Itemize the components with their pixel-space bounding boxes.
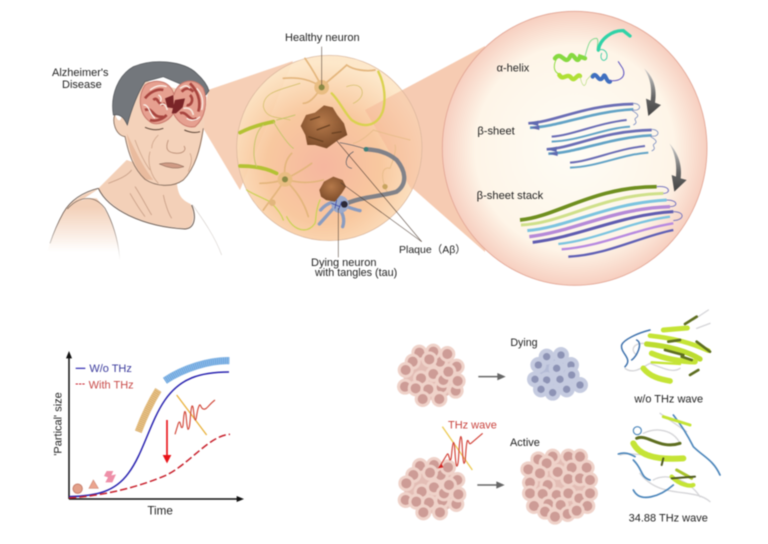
exposed brain	[140, 81, 206, 127]
legend: With THz	[89, 379, 134, 391]
circle background	[442, 11, 707, 285]
axis labels: Time	[147, 505, 173, 518]
small plaque	[319, 177, 346, 202]
faint neuron right	[353, 130, 410, 195]
axes	[66, 351, 244, 502]
axis labels	[52, 392, 173, 518]
label: Dying neuron with tangles (tau): with tangles (tau)	[314, 267, 397, 279]
panel: protein structures	[618, 310, 720, 524]
panel: cell clusters	[397, 337, 598, 525]
circle background	[237, 55, 422, 241]
beta-sheet stack	[520, 186, 682, 257]
large plaque	[301, 105, 347, 148]
cone: neuron circle to protein circle	[365, 46, 485, 252]
arrow to active cells	[477, 481, 505, 489]
arrow to dying cells	[478, 373, 506, 380]
THz wave on cells	[438, 427, 483, 470]
curve: with THz	[69, 434, 230, 498]
beta-sheet upper pair	[528, 103, 640, 142]
body and shirt	[47, 160, 222, 266]
label: THz wave: THz wave	[448, 419, 497, 431]
axis labels: 'Partical' size	[52, 392, 64, 456]
label: 34.88 THz wave: 34.88 THz wave	[629, 512, 708, 524]
legend: W/o THz	[89, 363, 132, 375]
dying neuron with tangles	[319, 143, 404, 227]
protein with 34.88 THz wave	[618, 413, 720, 502]
alpha-helix protein	[554, 31, 630, 86]
label: Plaque (Aβ): Plaque（Aβ）	[399, 244, 466, 256]
particles	[73, 361, 229, 493]
label: Alzheimer's Disease	[52, 67, 109, 91]
label: β-sheet stack: β-sheet stack	[477, 190, 544, 202]
arrow: helix to sheet	[644, 68, 661, 116]
arrow: sheet to stack	[669, 143, 687, 192]
leader lines	[322, 47, 422, 257]
THz wave	[175, 395, 215, 435]
curve: without THz	[69, 372, 229, 497]
illustration: man with Alzheimer's disease	[47, 62, 222, 266]
legend	[76, 363, 134, 391]
label: Active: Active	[510, 437, 540, 449]
hair	[113, 62, 209, 125]
healthy neuron left	[240, 115, 323, 230]
cone: brain to neuron circle	[203, 61, 293, 190]
label: Dying neuron with tangles (tau): Dying neuron	[311, 257, 376, 269]
panel: neuron circle	[237, 47, 422, 257]
cluster: active cells	[520, 449, 598, 525]
label: w/o THz wave: w/o THz wave	[633, 394, 703, 406]
label: Dying neuron with tangles (tau)	[311, 257, 397, 279]
panel: protein circle	[442, 11, 707, 285]
healthy neuron top	[263, 58, 385, 125]
label: Alzheimer's Disease: Alzheimer's	[52, 67, 109, 79]
cone overlay	[365, 90, 422, 190]
protein without THz wave	[622, 310, 710, 381]
label: Healthy neuron: Healthy neuron	[285, 32, 360, 44]
label: β-sheet: β-sheet	[477, 125, 516, 137]
cluster: untreated cells	[397, 344, 466, 407]
label: Alzheimer's Disease: Disease	[62, 79, 102, 91]
chart: particle size over time	[52, 351, 244, 518]
beta-sheet lower pair	[547, 129, 658, 168]
cluster: dying cells	[527, 347, 588, 401]
label: α-helix: α-helix	[497, 63, 530, 75]
cluster: THz treated cells	[398, 457, 466, 520]
red arrow	[163, 420, 171, 463]
label: Dying: Dying	[510, 337, 538, 349]
head and face	[114, 80, 207, 185]
